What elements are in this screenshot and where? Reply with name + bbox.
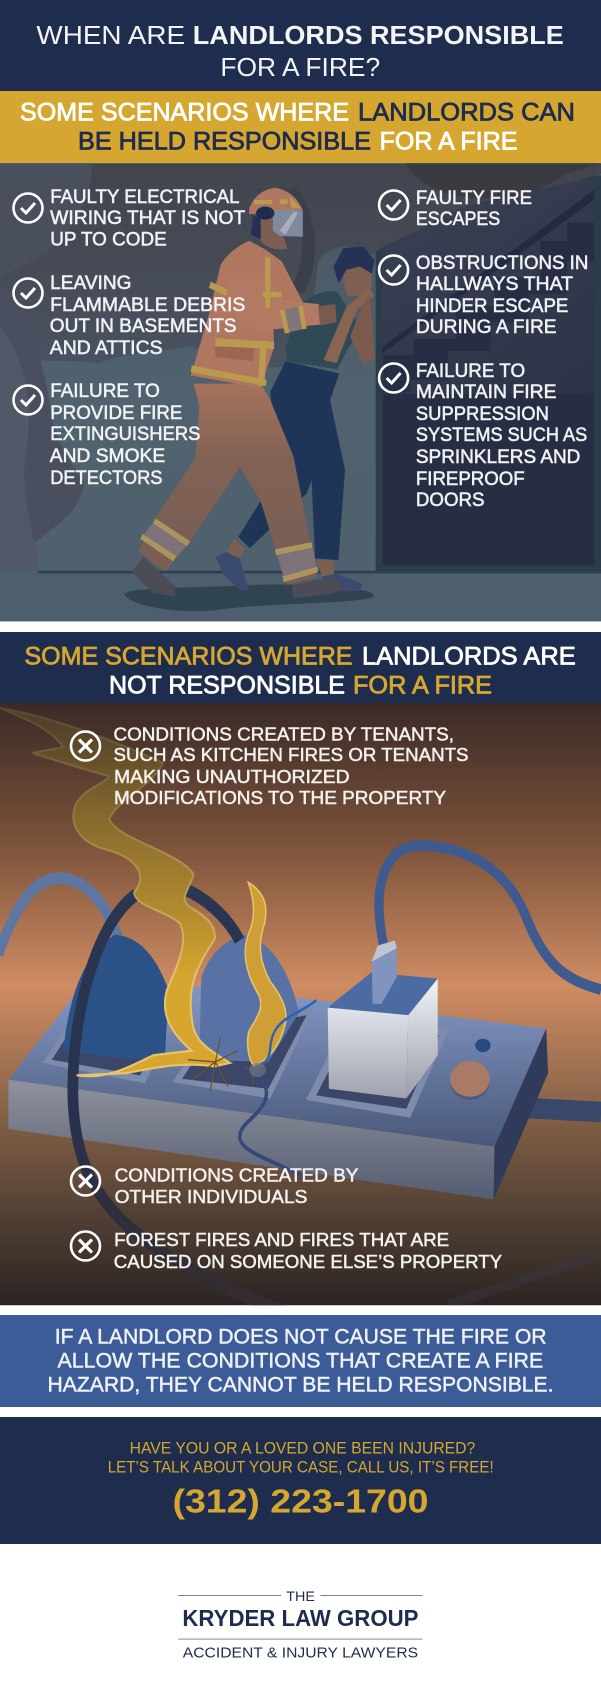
item: flammable debris: AND ATTICS — [50, 338, 162, 359]
item: other individuals — [115, 1165, 358, 1207]
item: faulty fire escapes — [416, 188, 532, 230]
item: extinguishers and detectors: FAILURE TO — [50, 381, 160, 402]
item: fire suppression systems: SUPPRESSION — [416, 404, 549, 425]
item: other individuals: CONDITIONS CREATED BY — [115, 1165, 358, 1186]
list: landlord responsibilities right column — [379, 188, 588, 511]
item: flammable debris: OUT IN BASEMENTS — [50, 316, 236, 337]
item: faulty fire escapes: FAULTY FIRE — [416, 188, 532, 209]
item: conditions created by tenants: CONDITIONS CREATED BY TENANTS, — [114, 724, 454, 744]
panel: call to action: LET’S TALK ABOUT YOUR CASE, CALL US, IT’S FREE! — [108, 1458, 494, 1476]
illustration: stairwell panel — [376, 176, 601, 576]
illustration: dark cord — [73, 889, 299, 1316]
item: fire suppression systems: FIREPROOF — [416, 469, 525, 490]
list: not responsible items — [71, 724, 502, 1272]
item: conditions created by tenants: MAKING UNAUTHORIZED — [114, 766, 350, 787]
illustration: smoke — [0, 163, 601, 620]
icon: check 1 — [14, 194, 42, 222]
icon: cross 3 — [71, 1232, 100, 1260]
illustration: floor — [0, 571, 601, 621]
illustration: main flame — [0, 708, 230, 1076]
item: extinguishers and detectors: AND SMOKE — [50, 446, 165, 467]
item: hallway obstructions: HALLWAYS THAT — [416, 274, 573, 295]
item: fire suppression systems: SYSTEMS SUCH AS — [416, 425, 587, 446]
illustration: cords behind strip — [0, 845, 601, 1305]
item: conditions created by tenants: SUCH AS KITCHEN FIRES OR TENANTS — [114, 744, 468, 765]
title band — [0, 0, 601, 91]
logo: The Kryder Law Group — [178, 1588, 422, 1662]
gold heading: responsible scenarios — [0, 91, 601, 163]
item: forest fires — [114, 1229, 502, 1272]
illustration: firefighter — [132, 188, 345, 598]
illustration: power strip body — [8, 986, 548, 1199]
callout: blue conclusion band: HAZARD, THEY CANNOT BE HELD RESPONSIBLE. — [48, 1373, 554, 1396]
item: forest fires: FOREST FIRES AND FIRES THAT ARE — [114, 1229, 449, 1250]
callout: blue conclusion band: ALLOW THE CONDITIONS THAT CREATE A FIRE — [58, 1349, 543, 1372]
icon: check 4 — [379, 190, 408, 220]
item: fire suppression systems: MAINTAIN FIRE — [416, 382, 557, 403]
panel: firefighter rescue illustration — [0, 163, 601, 621]
gold heading: responsible scenarios: LANDLORDS CAN — [358, 98, 575, 126]
panel: call to action: HAVE YOU OR A LOVED ONE BEEN INJURED? — [130, 1439, 475, 1457]
icon: cross 1 — [71, 732, 100, 760]
icon: check 3 — [14, 386, 42, 414]
callout: blue conclusion band — [0, 1315, 601, 1407]
illustration: white adapter — [328, 941, 491, 1100]
item: fire suppression systems: FAILURE TO — [416, 361, 525, 382]
logo: The Kryder Law Group: THE — [286, 1588, 315, 1604]
illustration: victim — [215, 247, 375, 591]
item: flammable debris: LEAVING — [50, 273, 132, 294]
item: fire suppression systems: DOORS — [416, 490, 484, 511]
gold heading: responsible scenarios: BE HELD RESPONSIBLE — [78, 127, 371, 155]
item: forest fires: CAUSED ON SOMEONE ELSE’S PROPERTY — [114, 1251, 502, 1272]
item: flammable debris: FLAMMABLE DEBRIS — [50, 295, 245, 316]
icon: check 6 — [379, 364, 408, 392]
item: faulty electrical wiring: UP TO CODE — [50, 230, 167, 251]
item: extinguishers and detectors — [50, 381, 200, 489]
gold heading: responsible scenarios: SOME SCENARIOS WHERE — [20, 98, 349, 126]
item: extinguishers and detectors: EXTINGUISHERS — [50, 424, 200, 445]
title text: LANDLORDS RESPONSIBLE — [193, 22, 564, 50]
item: flammable debris — [50, 273, 245, 359]
panel: call to action — [0, 1417, 601, 1544]
item: extinguishers and detectors: DETECTORS — [50, 468, 163, 489]
item: faulty electrical wiring — [50, 187, 246, 251]
item: conditions created by tenants: MODIFICATIONS TO THE PROPERTY — [114, 787, 446, 808]
icon: check 5 — [379, 256, 408, 284]
phone number: (312) 223-1700 — [172, 1482, 428, 1519]
list: landlord responsibilities left column — [14, 187, 246, 489]
item: extinguishers and detectors: PROVIDE FIRE — [50, 403, 182, 424]
navy heading: not responsible scenarios: NOT RESPONSIBLE — [109, 672, 345, 700]
item: fire suppression systems: SPRINKLERS AND — [416, 447, 580, 468]
title text: FOR A FIRE? — [220, 54, 380, 82]
illustration: small flame — [245, 882, 286, 1066]
icon: check 2 — [14, 278, 42, 308]
item: hallway obstructions: OBSTRUCTIONS IN — [416, 253, 588, 274]
item: hallway obstructions: DURING A FIRE — [416, 317, 557, 338]
navy heading: not responsible scenarios: FOR A FIRE — [353, 672, 492, 700]
item: faulty electrical wiring: WIRING THAT IS NOT — [50, 208, 246, 229]
illustration: plug domes — [63, 935, 299, 1062]
item: fire suppression systems — [416, 361, 587, 511]
navy heading: not responsible scenarios: SOME SCENARIOS WHERE — [24, 643, 352, 671]
navy heading: not responsible scenarios: LANDLORDS ARE — [362, 643, 576, 671]
item: other individuals: OTHER INDIVIDUALS — [115, 1186, 307, 1207]
logo: The Kryder Law Group: KRYDER LAW GROUP — [182, 1605, 418, 1631]
illustration: sparks and wires — [188, 1000, 316, 1178]
item: hallway obstructions: HINDER ESCAPE — [416, 296, 568, 317]
item: conditions created by tenants — [114, 724, 468, 808]
illustration: sockets — [42, 1008, 449, 1118]
title text — [36, 22, 564, 82]
item: faulty fire escapes: ESCAPES — [416, 209, 500, 230]
item: faulty electrical wiring: FAULTY ELECTRICAL — [50, 187, 240, 208]
title text: WHEN ARE — [36, 22, 185, 50]
icon: cross 2 — [71, 1166, 100, 1196]
item: hallway obstructions — [416, 253, 588, 338]
gold heading: responsible scenarios: FOR A FIRE — [380, 127, 518, 155]
panel: burning power strip illustration — [0, 703, 601, 1316]
logo: The Kryder Law Group: ACCIDENT & INJURY LAWYERS — [183, 1646, 418, 1662]
callout: blue conclusion band: IF A LANDLORD DOES NOT CAUSE THE FIRE OR — [55, 1325, 547, 1348]
navy heading: not responsible scenarios — [0, 632, 601, 704]
